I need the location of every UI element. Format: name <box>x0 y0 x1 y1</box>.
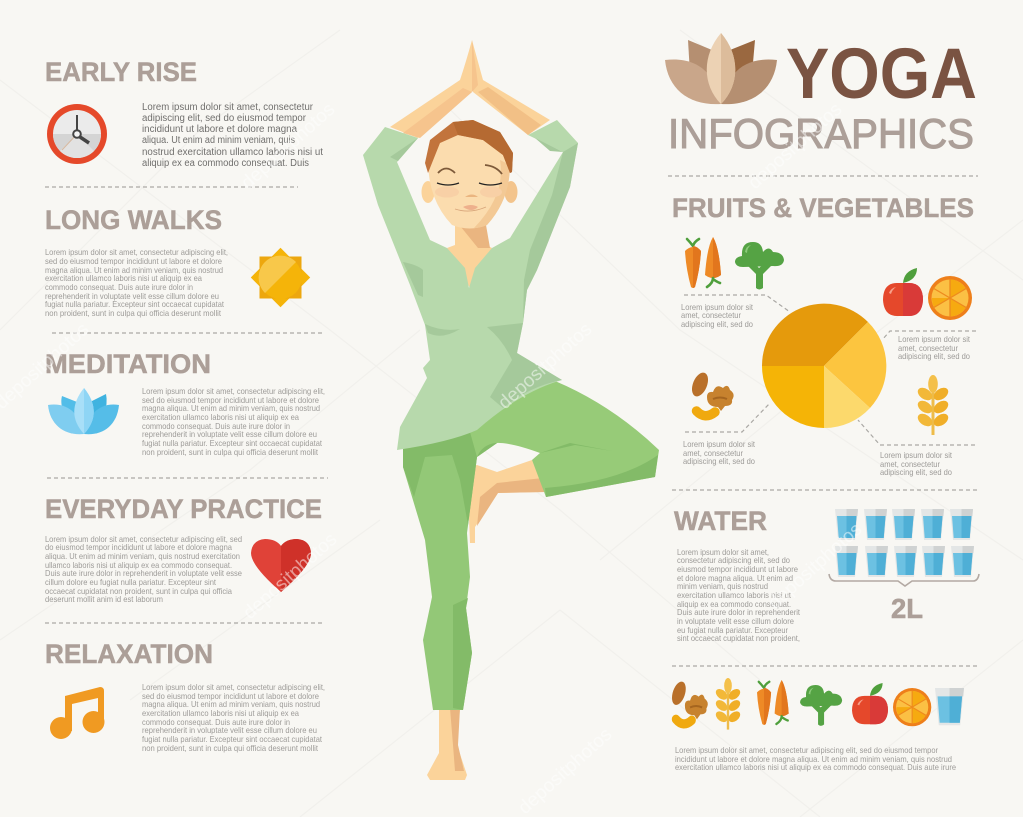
panel: long walks <box>45 205 310 318</box>
text: water body: sint occaecat cupidatat non proident, <box>677 634 800 643</box>
icon: wheat <box>714 678 742 730</box>
raised thigh <box>470 381 659 497</box>
leader lines <box>684 295 976 445</box>
text: early rise body: aliquip ex ea commodo consequat. Duis <box>142 158 309 169</box>
label: nuts: adipiscing elit, sed do <box>683 457 755 466</box>
text: everyday practice body: aliqua. Ut enim ad minim veniam, quis nostrud exercitation <box>45 552 240 561</box>
text: water body: Duis aute irure dolor in reprehenderit <box>677 608 801 617</box>
heading: fruits and vegetables: FRUITS & VEGETABLES <box>672 193 974 223</box>
text: food row body: exercitation ullamco laboris nisi ut aliquip ex ea commodo consequat. Duis aute irure <box>675 763 956 772</box>
text: relaxation body: exercitation ullamco laboris nisi ut aliquip ex ea <box>142 709 299 718</box>
text: everyday practice body <box>45 535 242 604</box>
text: relaxation body: magna aliqua. Ut enim ad minim veniam, quis nostrud <box>142 700 320 709</box>
icon: carrots <box>685 237 721 288</box>
text: food row body: Lorem ipsum dolor sit amet, consectetur adipiscing elit, sed do eiusmod tempor <box>675 746 938 755</box>
text: early rise body: adipiscing elit, sed do eiusmod tempor <box>142 113 307 124</box>
text: water body: Lorem ipsum dolor sit amet, <box>677 548 769 557</box>
text: early rise body: incididunt ut labore et dolore magna <box>142 124 298 135</box>
icon: broccoli <box>800 685 842 726</box>
icon: ten glasses of water <box>835 509 974 577</box>
watermark: depositphotos <box>239 529 341 624</box>
text: relaxation body: Lorem ipsum dolor sit amet, consectetur adipiscing elit, <box>142 683 325 692</box>
title: yoga: YOGA <box>786 35 977 114</box>
text: everyday practice body: Duis aute irure dolor in reprehenderit in voluptate velit esse <box>45 569 242 578</box>
icon: glass <box>935 688 964 725</box>
icon: nuts <box>669 679 708 724</box>
label: fruits <box>898 335 971 361</box>
watermark: depositphotos <box>237 99 339 194</box>
label: vegetables: adipiscing elit, sed do <box>681 320 753 329</box>
icon: heart <box>251 539 311 592</box>
text: meditation body: exercitation ullamco laboris nisi ut aliquip ex ea <box>142 413 299 422</box>
label: nuts: Lorem ipsum dolor sit <box>683 440 756 449</box>
panel: meditation <box>45 349 325 457</box>
icon: apple <box>852 683 888 724</box>
icon: clock <box>47 104 107 164</box>
standing foot <box>427 708 467 780</box>
text: water body: aliquip ex ea commodo consequat. <box>677 600 791 609</box>
text: relaxation body: sed do eiusmod tempor incididunt ut labore et dolore <box>142 692 319 701</box>
text: early rise body: Lorem ipsum dolor sit amet, consectetur <box>142 102 314 113</box>
icon: sun <box>251 248 310 307</box>
text: long walks body: sed do eiusmod tempor incididunt ut labore et dolore <box>45 257 222 266</box>
icon: blue lotus <box>48 388 119 434</box>
head <box>422 120 518 228</box>
text: water body: et dolore magna aliqua. Ut enim ad <box>677 574 793 583</box>
watermark: depositphotos <box>764 519 866 614</box>
text: everyday practice body: cillum dolore eu fugiat nulla pariatur. Excepteur sint <box>45 578 217 587</box>
panel: everyday practice <box>45 494 322 604</box>
text: meditation body <box>142 387 325 457</box>
panel: water <box>674 506 979 643</box>
panel: early rise <box>45 57 323 169</box>
neck <box>447 222 492 288</box>
label: grains <box>880 451 953 477</box>
label: nuts: amet, consectetur <box>683 449 743 458</box>
heading: long walks: LONG WALKS <box>45 205 222 235</box>
text: meditation body: magna aliqua. Ut enim ad minim veniam, quis nostrud <box>142 404 320 413</box>
panel: food row <box>669 678 964 772</box>
text: meditation body: commodo consequat. Duis aute irure dolor in <box>142 422 290 431</box>
text: water body: minim veniam, quis nostrud <box>677 582 768 591</box>
icon: orange <box>893 688 931 726</box>
watermark: depositphotos <box>744 99 846 194</box>
label: grains: Lorem ipsum dolor sit <box>880 451 953 460</box>
text: meditation body: non proident, sunt in culpa qui officia deserunt mollit <box>142 448 319 457</box>
label: grains: adipiscing elit, sed do <box>880 468 952 477</box>
pie chart <box>762 304 886 428</box>
watermark <box>0 99 866 817</box>
icon: music note <box>50 687 104 739</box>
text: food row body: incididunt ut labore et dolore magna aliqua. Ut enim ad minim veniam, quis nostrud <box>675 755 952 764</box>
text: long walks body: commodo consequat. Duis aute irure dolor in <box>45 283 193 292</box>
text: long walks body: reprehenderit in voluptate velit esse cillum dolore eu <box>45 292 219 301</box>
text: water body: in voluptate velit esse cillum dolore <box>677 617 794 626</box>
title: infographics: INFOGRAPHICS <box>668 110 974 157</box>
text: everyday practice body: occaecat cupidatat non proident, sunt in culpa qui officia <box>45 587 232 596</box>
text: long walks body: Lorem ipsum dolor sit amet, consectetur adipiscing elit, <box>45 248 228 257</box>
panel: fruit pie chart <box>681 237 976 477</box>
text: early rise body: nostrud exercitation ullamco laboris nisi ut <box>142 147 323 158</box>
text: early rise body <box>142 102 323 169</box>
text: long walks body: magna aliqua. Ut enim ad minim veniam, quis nostrud <box>45 266 223 275</box>
text: water body: eu fugiat nulla pariatur. Excepteur <box>677 626 788 635</box>
text: water body <box>677 548 801 643</box>
text: long walks body: fugiat nulla pariatur. Excepteur sint occaecat cupidatat <box>45 300 225 309</box>
text: water body: consectetur adipiscing elit, sed do <box>677 556 790 565</box>
panel: relaxation <box>45 639 325 753</box>
icon: nuts <box>689 370 734 416</box>
heading: water: WATER <box>674 506 767 536</box>
heading: everyday practice: EVERYDAY PRACTICE <box>45 494 322 524</box>
watermark: depositphotos <box>514 724 616 817</box>
text: water body: exercitation ullamco laboris nisi ut <box>677 591 792 600</box>
figure: woman in tree pose <box>363 40 659 780</box>
text: everyday practice body: deserunt mollit anim id est laborum <box>45 595 163 604</box>
icon: orange <box>928 276 972 320</box>
text: meditation body: reprehenderit in voluptate velit esse cillum dolore eu <box>142 430 317 439</box>
text: relaxation body: reprehenderit in voluptate velit esse cillum dolore eu <box>142 726 317 735</box>
shirt shading <box>390 138 578 408</box>
raised foot <box>467 460 545 543</box>
text: relaxation body: fugiat nulla pariatur. Excepteur sint occaecat cupidatat <box>142 735 323 744</box>
icon: apple <box>883 268 923 316</box>
text: meditation body: fugiat nulla pariatur. Excepteur sint occaecat cupidatat <box>142 439 323 448</box>
label: nuts <box>683 440 756 466</box>
label: 2L: 2L <box>891 593 923 624</box>
forearms and hands <box>390 40 472 138</box>
label: grains: amet, consectetur <box>880 460 940 469</box>
watermark: depositphotos <box>494 319 596 414</box>
icon: carrots <box>757 680 789 725</box>
text: long walks body: exercitation ullamco laboris nisi ut aliquip ex ea <box>45 274 202 283</box>
brace <box>829 574 979 586</box>
text: relaxation body: non proident, sunt in culpa qui officia deserunt mollit <box>142 744 319 753</box>
text: relaxation body <box>142 683 325 753</box>
label: fruits: Lorem ipsum dolor sit <box>898 335 971 344</box>
label: vegetables <box>681 303 754 329</box>
heading: early rise: EARLY RISE <box>45 57 197 87</box>
text: food row body <box>675 746 956 772</box>
label: fruits: amet, consectetur <box>898 344 958 353</box>
text: everyday practice body: do eiusmod tempor incididunt ut labore et dolore magna <box>45 543 232 552</box>
text: water body: eiusmod tempor incididunt ut labore <box>677 565 798 574</box>
text: meditation body: sed do eiusmod tempor incididunt ut labore et dolore <box>142 396 319 405</box>
text: long walks body: non proident, sunt in culpa qui officia deserunt mollit <box>45 309 222 318</box>
heading: relaxation: RELAXATION <box>45 639 213 669</box>
text: everyday practice body: ullamco laboris nisi ut aliquip ex ea commodo consequat. <box>45 561 232 570</box>
label: vegetables: amet, consectetur <box>681 311 741 320</box>
heading: meditation: MEDITATION <box>45 349 211 379</box>
text: early rise body: aliqua. Ut enim ad minim veniam, quis <box>142 135 295 146</box>
text: long walks body <box>45 248 228 318</box>
text: everyday practice body: Lorem ipsum dolor sit amet, consectetur adipiscing elit, sed <box>45 535 242 544</box>
logo: brown lotus <box>665 33 777 104</box>
text: meditation body: Lorem ipsum dolor sit amet, consectetur adipiscing elit, <box>142 387 325 396</box>
standing leg <box>403 410 530 710</box>
label: fruits: adipiscing elit, sed do <box>898 352 970 361</box>
label: vegetables: Lorem ipsum dolor sit <box>681 303 754 312</box>
text: relaxation body: commodo consequat. Duis aute irure dolor in <box>142 718 290 727</box>
icon: broccoli <box>735 242 784 290</box>
icon: wheat <box>915 375 951 435</box>
shirt <box>363 120 578 450</box>
